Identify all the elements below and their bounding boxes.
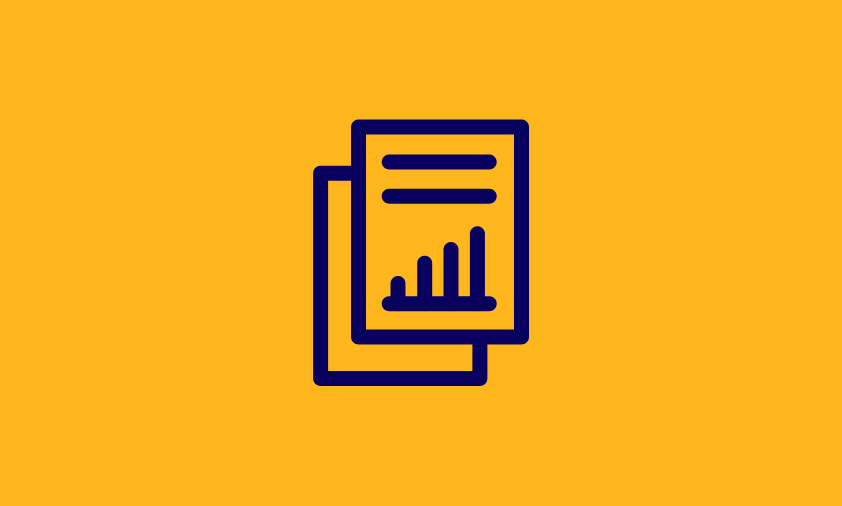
icon: back page outline bbox=[321, 173, 480, 378]
bar chart bbox=[389, 234, 489, 304]
icon: text lines bbox=[389, 162, 489, 196]
icon: front page outline bbox=[358, 127, 522, 337]
